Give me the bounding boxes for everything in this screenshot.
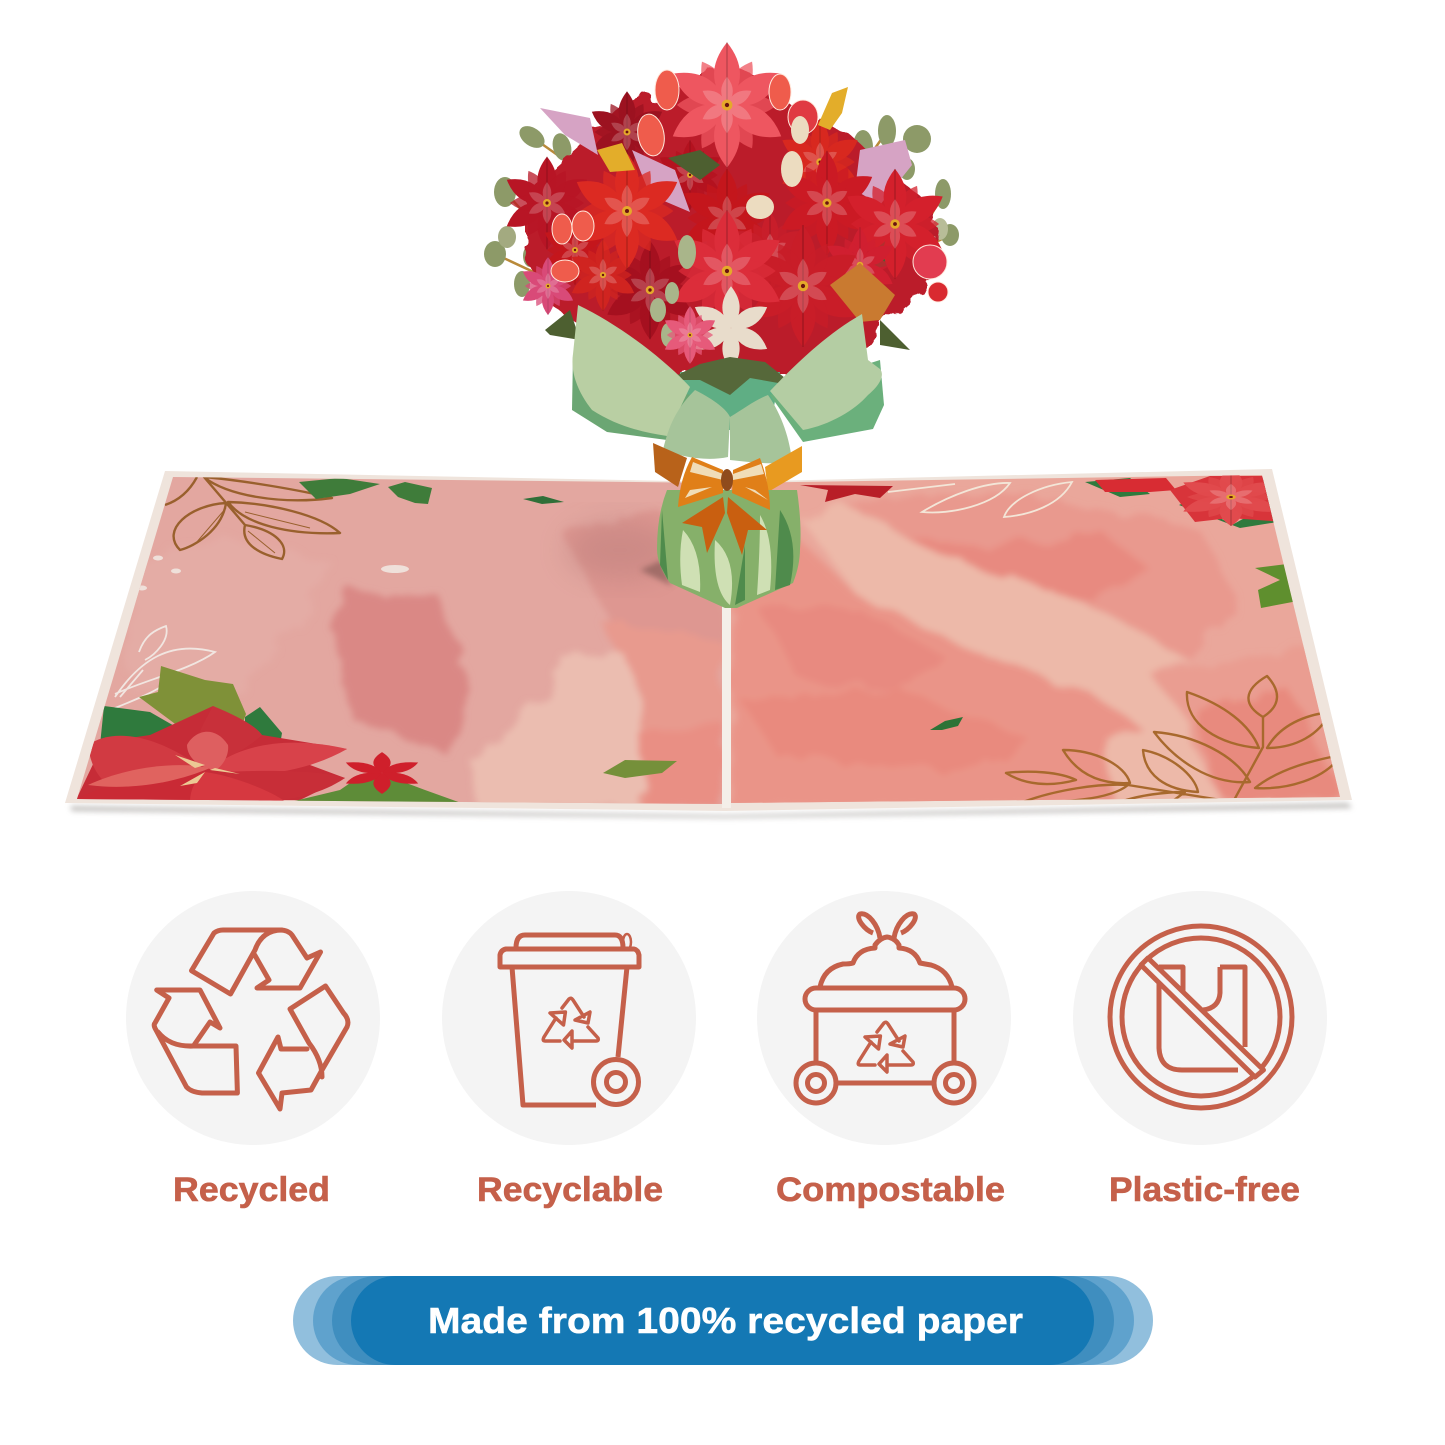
- dark green leaves: [667, 357, 795, 395]
- banner layer 3: [332, 1276, 1114, 1365]
- gold leaf outlines top-left: [165, 477, 340, 559]
- paper speckles: [137, 556, 409, 590]
- mauve blooms: [540, 108, 912, 212]
- yellow leaves: [597, 87, 848, 172]
- label: Compostable: Compostable: [776, 1171, 1005, 1209]
- cart outline: [796, 914, 974, 1103]
- poinsettia top right: [1085, 475, 1274, 528]
- right wrap base: [770, 360, 884, 442]
- card shadow: [70, 803, 1352, 818]
- banner layer 1: [293, 1276, 1153, 1365]
- pink flower: [659, 304, 721, 366]
- green leaves right edge: [1255, 564, 1293, 608]
- label: Recyclable: Recyclable: [477, 1171, 663, 1209]
- recycled circle: [126, 891, 380, 1145]
- icon: recyclable bin: [442, 891, 696, 1145]
- white leaf outlines top: [888, 482, 1072, 517]
- poinsettia flowers: [517, 37, 954, 352]
- bow loops: [678, 457, 770, 510]
- vase stripes: [680, 515, 771, 605]
- pop-up card: [60, 466, 1368, 818]
- icon: compostable cart: [757, 891, 1011, 1145]
- inner wrap backing: [680, 372, 780, 430]
- poinsettia bottom-left: [76, 666, 347, 802]
- prohibited bag outline: [1110, 926, 1292, 1108]
- small green leaf: [523, 496, 564, 504]
- right wrap leaf: [770, 314, 882, 430]
- icon: plastic-free bag: [1073, 891, 1327, 1145]
- dark crimson back flowers: [497, 88, 780, 343]
- cart recycle symbol: [858, 1022, 913, 1072]
- poinsettia left petals: [1095, 478, 1176, 492]
- bow: [678, 457, 770, 555]
- bow leaves: [663, 390, 792, 463]
- right ribbon: [765, 446, 802, 492]
- holly leaves in bouquet: [545, 150, 910, 350]
- left wrap leaf: [572, 305, 690, 436]
- bin outline: [500, 934, 639, 1105]
- banner text: Made from 100% recycled paper: [428, 1300, 1023, 1341]
- bag circle: [1073, 891, 1327, 1145]
- orange ribbon: [653, 443, 802, 492]
- olive leaf: [139, 666, 246, 724]
- small fallen leaf: [930, 717, 963, 730]
- orange leaf: [830, 263, 895, 322]
- pale eucalyptus centre: [650, 235, 696, 347]
- bouquet shadow on left page: [568, 519, 658, 580]
- label: Recycled: Recycled: [173, 1171, 330, 1209]
- vase: [657, 490, 801, 608]
- olive fallen leaf: [603, 760, 677, 778]
- bin recycle symbol: [543, 998, 598, 1048]
- cream petals: [746, 116, 809, 219]
- recycled arrows: [154, 930, 348, 1109]
- eucalyptus leaves: [484, 115, 959, 297]
- right page: [728, 466, 1368, 810]
- bow knot: [721, 469, 733, 491]
- right page watercolor washes: [731, 490, 1345, 810]
- bow tails: [682, 497, 767, 555]
- vase contact shadow: [640, 560, 672, 586]
- poinsettia green leaves: [1085, 478, 1290, 528]
- holly leaves top-left: [299, 478, 432, 504]
- dark red flower top centre: [800, 485, 893, 502]
- bin circle: [442, 891, 696, 1145]
- vase body: [657, 490, 801, 608]
- coral petals: [551, 70, 948, 302]
- banner layer 4: [351, 1276, 1094, 1365]
- big red petals: [76, 706, 347, 802]
- green leaves bottom: [294, 779, 458, 802]
- bow highlights: [685, 462, 768, 500]
- cart circle: [757, 891, 1011, 1145]
- centre fold: [722, 600, 731, 808]
- dark green leaves: [100, 706, 282, 739]
- small poinsettia: [342, 752, 422, 794]
- bouquet mass: [525, 65, 935, 375]
- white flower: [691, 286, 771, 370]
- left page: [60, 470, 730, 810]
- label: Plastic-free: Plastic-free: [1109, 1171, 1300, 1209]
- white leaf outlines left: [110, 626, 215, 710]
- card paper border: [65, 469, 1352, 811]
- left ribbon: [653, 443, 687, 487]
- poinsettia base: [1170, 476, 1284, 522]
- left wrap base: [572, 354, 690, 440]
- banner: made from 100% recycled paper: [293, 1276, 1153, 1365]
- icon: recycled: [126, 891, 380, 1145]
- poinsettia red petals: [1183, 475, 1271, 526]
- eucalyptus stems: [495, 131, 950, 275]
- banner layer 2: [313, 1276, 1134, 1365]
- left page watercolor washes: [130, 510, 723, 810]
- pop-up bouquet: [484, 37, 959, 608]
- gold leaf branch bottom right: [1006, 676, 1341, 803]
